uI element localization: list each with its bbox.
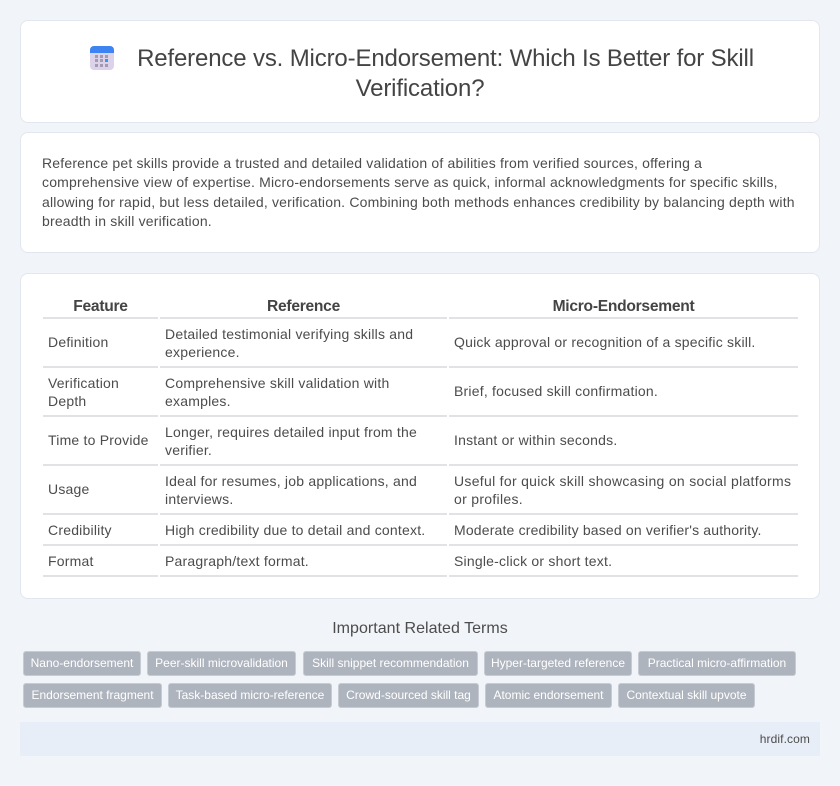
row: format: Single-click or short text. xyxy=(454,553,612,569)
row: time to provide: verifier. xyxy=(165,442,212,458)
related term tags: Task-based micro-reference xyxy=(176,688,324,702)
table header xyxy=(73,298,694,315)
row: definition: Quick approval or recognition of a specific skill. xyxy=(454,334,756,350)
row: verification depth xyxy=(48,375,658,409)
row: usage: Ideal for resumes, job applications, and xyxy=(165,473,417,489)
panel: comparison table xyxy=(20,273,820,599)
intro text: Reference pet skills provide a trusted and detailed validation of abilities from verified sources, offering a xyxy=(42,155,702,171)
row: definition: Detailed testimonial verifying skills and xyxy=(165,326,413,342)
related term tags: Endorsement fragment xyxy=(31,688,154,702)
icon: calendar xyxy=(90,46,114,70)
related term tags: Contextual skill upvote xyxy=(626,688,747,702)
footer source: hrdif.com xyxy=(760,732,810,746)
row: time to provide: Instant or within seconds. xyxy=(454,432,617,448)
row: credibility: High credibility due to detail and context. xyxy=(165,522,425,538)
panel: header xyxy=(20,20,820,123)
row: verification depth: Comprehensive skill validation with xyxy=(165,375,389,391)
related term tags: Practical micro-affirmation xyxy=(648,656,786,670)
intro text xyxy=(42,155,795,229)
row: time to provide: Longer, requires detailed input from the xyxy=(165,424,417,440)
related term tags: Nano-endorsement xyxy=(31,656,133,670)
row: definition: Definition xyxy=(48,334,108,350)
intro text: breadth in skill verification. xyxy=(42,213,212,229)
related term tags: Hyper-targeted reference xyxy=(491,656,625,670)
row: usage: Useful for quick skill showcasing on social platforms xyxy=(454,473,791,489)
related term tags: Skill snippet recommendation xyxy=(312,656,469,670)
row: definition: experience. xyxy=(165,344,240,360)
title xyxy=(137,45,754,102)
row: usage: interviews. xyxy=(165,491,233,507)
intro text: comprehensive view of expertise. Micro-endorsements serve as quick, informal acknowledgments for specific skills, xyxy=(42,174,778,190)
table header: Feature xyxy=(73,298,128,315)
table header: Reference xyxy=(267,298,340,315)
title: Verification? xyxy=(356,75,484,102)
table header: Micro-Endorsement xyxy=(553,298,694,315)
row: credibility: Credibility xyxy=(48,522,112,538)
row: usage: Usage xyxy=(48,481,90,497)
panel: introduction xyxy=(20,132,820,253)
row: time to provide xyxy=(48,424,617,458)
row: format: Format xyxy=(48,553,94,569)
title: Reference vs. Micro-Endorsement: Which Is Better for Skill xyxy=(137,45,754,72)
row: usage: or profiles. xyxy=(454,491,523,507)
row: usage xyxy=(48,473,791,507)
row: format xyxy=(48,553,612,569)
related term tags: Atomic endorsement xyxy=(493,688,604,702)
row: verification depth: Verification xyxy=(48,375,119,391)
row: verification depth: Depth xyxy=(48,393,86,409)
row: credibility: Moderate credibility based on verifier's authority. xyxy=(454,522,762,538)
heading: important related terms: Important Related Terms xyxy=(332,620,508,637)
row: credibility xyxy=(48,522,762,538)
footer bar xyxy=(20,722,820,756)
row: verification depth: examples. xyxy=(165,393,231,409)
row: definition xyxy=(48,326,756,360)
row: format: Paragraph/text format. xyxy=(165,553,309,569)
related term tags: Crowd-sourced skill tag xyxy=(346,688,471,702)
related term tags xyxy=(23,651,796,708)
row: time to provide: Time to Provide xyxy=(48,432,149,448)
row: verification depth: Brief, focused skill confirmation. xyxy=(454,383,658,399)
intro text: allowing for rapid, but less detailed, verification. Combining both methods enhances credibility by balancing depth with xyxy=(42,194,795,210)
related term tags: Peer-skill microvalidation xyxy=(155,656,288,670)
